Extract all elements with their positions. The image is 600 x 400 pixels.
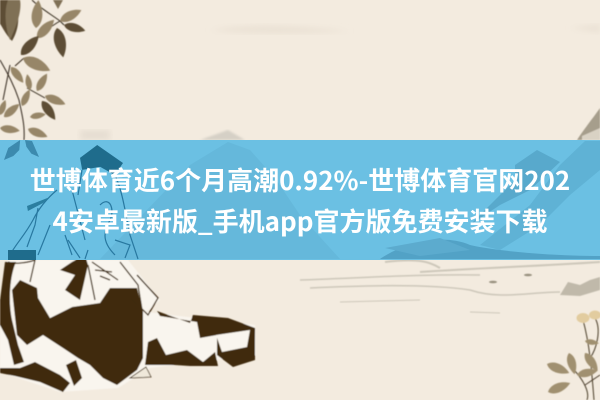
- title: [30, 161, 570, 239]
- shoreline and mist washes: [300, 260, 600, 313]
- scholar sleeve edge: [27, 198, 48, 211]
- tinted scholar robe lines: [10, 170, 138, 259]
- title line 1: 世博体育近6个月高潮0.92%-世博体育官网202: [30, 161, 570, 198]
- title line 2: 4安卓最新版_手机app官方版免费安装下载: [53, 202, 547, 239]
- leafy branch, top left: [0, 0, 86, 141]
- seated scholar figure, lower body: [0, 255, 256, 392]
- tinted mountains in band: [100, 141, 600, 259]
- scholar sleeve base: [8, 250, 36, 260]
- blue title band: [0, 140, 600, 260]
- tinted leaf right: [25, 140, 39, 157]
- rock outcrop, top right: [577, 108, 600, 140]
- scholar hat: [80, 145, 123, 175]
- flower and leaves, bottom right: [545, 310, 600, 400]
- tinted leaf left: [4, 140, 21, 160]
- distant shore trees: [489, 274, 600, 296]
